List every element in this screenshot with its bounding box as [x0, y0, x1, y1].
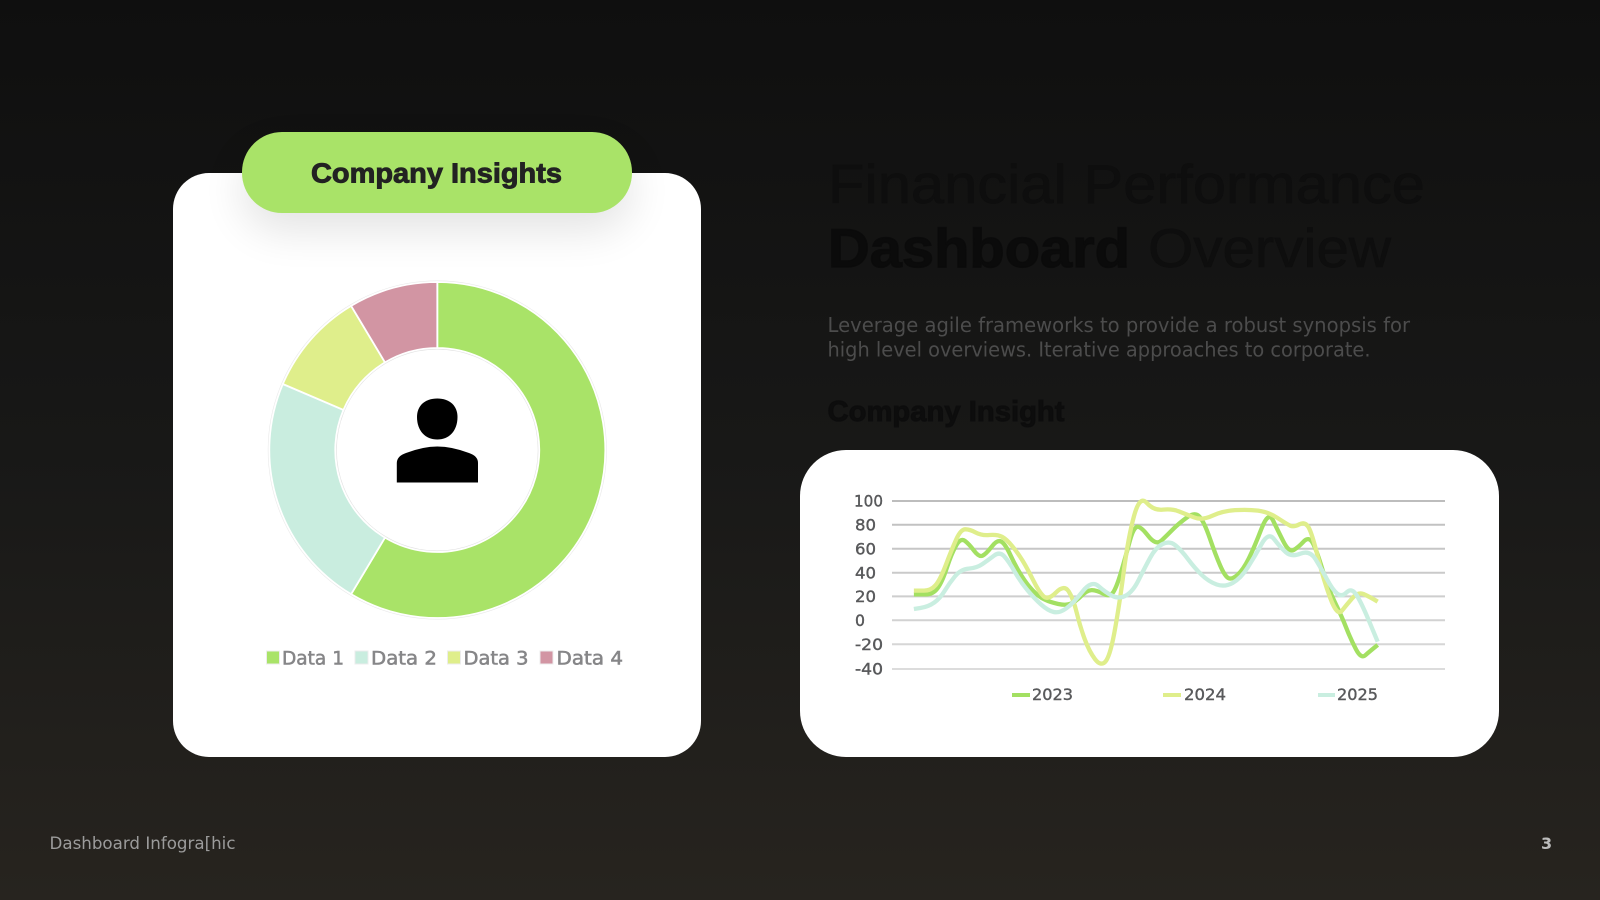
line: 2023 — [914, 514, 1378, 656]
y axis labels: -20 — [855, 635, 883, 654]
panel: company insights — [173, 132, 701, 757]
donut legend: Data 3 — [464, 648, 528, 670]
subheading: Company Insight — [828, 396, 1065, 428]
donut chart — [268, 281, 606, 619]
title line 2: Overview — [1148, 217, 1391, 279]
page number: 3 — [1541, 834, 1552, 853]
heading pill — [242, 132, 632, 213]
panel: line chart — [800, 450, 1499, 756]
title and intro text — [828, 153, 1425, 428]
title line 2 — [828, 217, 1391, 279]
slice: data 2 — [269, 384, 385, 594]
line: 2025 — [914, 536, 1378, 642]
y axis labels: 100 — [854, 492, 883, 510]
y axis labels — [854, 492, 883, 678]
description: high level overviews. Iterative approaches to corporate. — [828, 338, 1370, 362]
heading pill: Company Insights — [311, 158, 562, 188]
slice: data 3 — [283, 306, 385, 410]
y axis labels: 20 — [855, 587, 876, 606]
title line 2: Dashboard — [828, 217, 1130, 279]
chart legend: 2025 — [1337, 685, 1378, 704]
chart legend: 2023 — [1032, 685, 1073, 704]
title line 1: Financial Performance — [828, 153, 1425, 215]
slice: data 1 — [351, 282, 605, 618]
y axis labels: 60 — [855, 540, 876, 558]
y axis labels: 40 — [855, 564, 876, 582]
icon: person — [397, 398, 478, 482]
footer label: Dashboard Infogra[hic — [50, 834, 236, 853]
y axis labels: -40 — [855, 660, 883, 678]
donut legend: Data 4 — [556, 648, 623, 670]
description: Leverage agile frameworks to provide a robust synopsis for — [828, 313, 1411, 337]
chart legend: 2024 — [1184, 685, 1226, 704]
y axis labels: 0 — [855, 611, 865, 630]
data lines — [914, 501, 1378, 664]
description — [828, 313, 1411, 362]
slice: data 4 — [351, 282, 437, 362]
chart grid lines — [892, 501, 1445, 669]
line: 2024 — [914, 501, 1378, 664]
chart legend — [1012, 685, 1378, 704]
donut legend — [266, 648, 623, 670]
donut legend: Data 1 — [282, 648, 344, 670]
donut legend: Data 2 — [371, 648, 437, 670]
y axis labels: 80 — [855, 516, 876, 534]
